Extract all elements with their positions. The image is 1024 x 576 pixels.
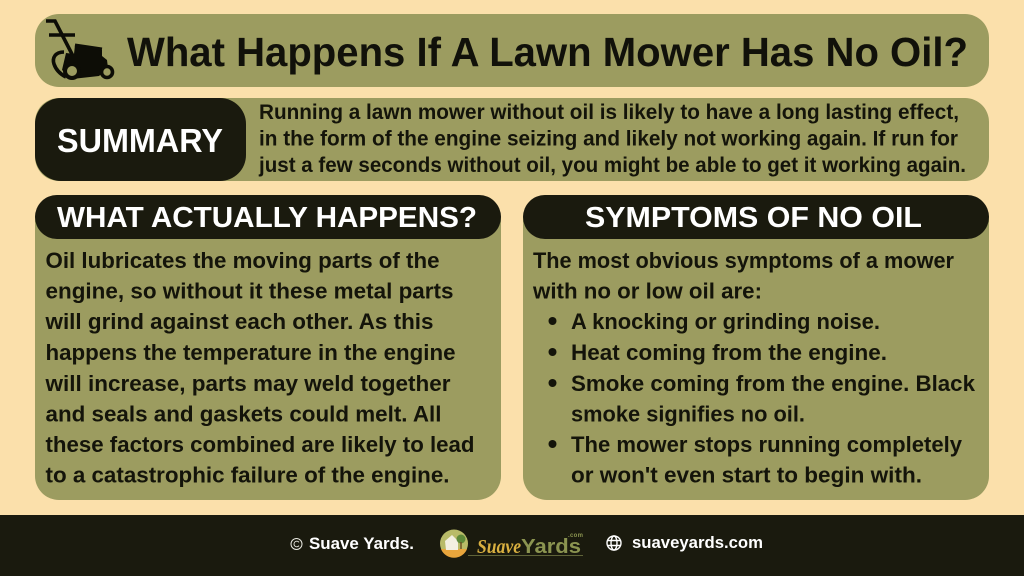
panel: what actually happens	[35, 195, 501, 500]
intro text: The most obvious symptoms of a mower	[533, 248, 954, 273]
intro text: with no or low oil are:	[532, 278, 762, 304]
intro text	[532, 248, 954, 304]
title text: What Happens If A Lawn Mower Has No Oil?	[127, 29, 968, 75]
summary text: in the form of the engine seizing and likely not working again. If run for	[259, 128, 958, 150]
icon: globe	[607, 536, 621, 550]
copyright: Suave Yards.	[309, 535, 414, 553]
symptom list: Smoke coming from the engine. Black	[571, 371, 976, 396]
logo: Suave Yards: Suave	[477, 536, 521, 558]
icon: lawn mower	[46, 21, 112, 79]
body text: will grind against each other. As this	[44, 309, 433, 334]
body text: happens the temperature in the engine	[46, 340, 456, 365]
symptom list: Heat coming from the engine.	[571, 340, 887, 365]
summary text	[258, 101, 966, 177]
body text: will increase, parts may weld together	[44, 371, 451, 396]
heading: what actually happens: WHAT ACTUALLY HAPPENS?	[57, 202, 477, 234]
logo: Suave Yards: Yards	[521, 536, 581, 558]
body text: and seals and gaskets could melt. All	[46, 402, 442, 426]
symptom list	[548, 309, 976, 488]
heading: what actually happens	[35, 195, 501, 239]
symptom list: smoke signifies no oil.	[571, 402, 805, 426]
summary text: Running a lawn mower without oil is likely to have a long lasting effect,	[259, 101, 959, 124]
summary text: just a few seconds without oil, you might be able to get it working again.	[258, 154, 966, 177]
panel: symptoms of no oil	[523, 195, 989, 500]
website: suaveyards.com	[632, 533, 763, 552]
symptom list: or won't even start to begin with.	[571, 462, 922, 488]
logo: Suave Yards	[440, 530, 583, 558]
body text: Oil lubricates the moving parts of the	[46, 248, 439, 273]
summary label	[35, 98, 246, 181]
body text: to a catastrophic failure of the engine.	[46, 462, 450, 488]
body text: engine, so without it these metal parts	[46, 278, 454, 304]
summary label: SUMMARY	[57, 122, 223, 159]
body text: these factors combined are likely to lead	[46, 432, 474, 457]
footer	[0, 515, 1024, 576]
panel: summary	[35, 98, 989, 181]
body text	[44, 248, 474, 488]
heading: symptoms of no oil: SYMPTOMS OF NO OIL	[585, 202, 922, 234]
symptom list: The mower stops running completely	[571, 432, 963, 457]
symptom list: A knocking or grinding noise.	[571, 309, 880, 334]
heading: symptoms of no oil	[523, 195, 989, 239]
logo: Suave Yards: .com	[568, 533, 583, 539]
title banner	[35, 14, 989, 87]
